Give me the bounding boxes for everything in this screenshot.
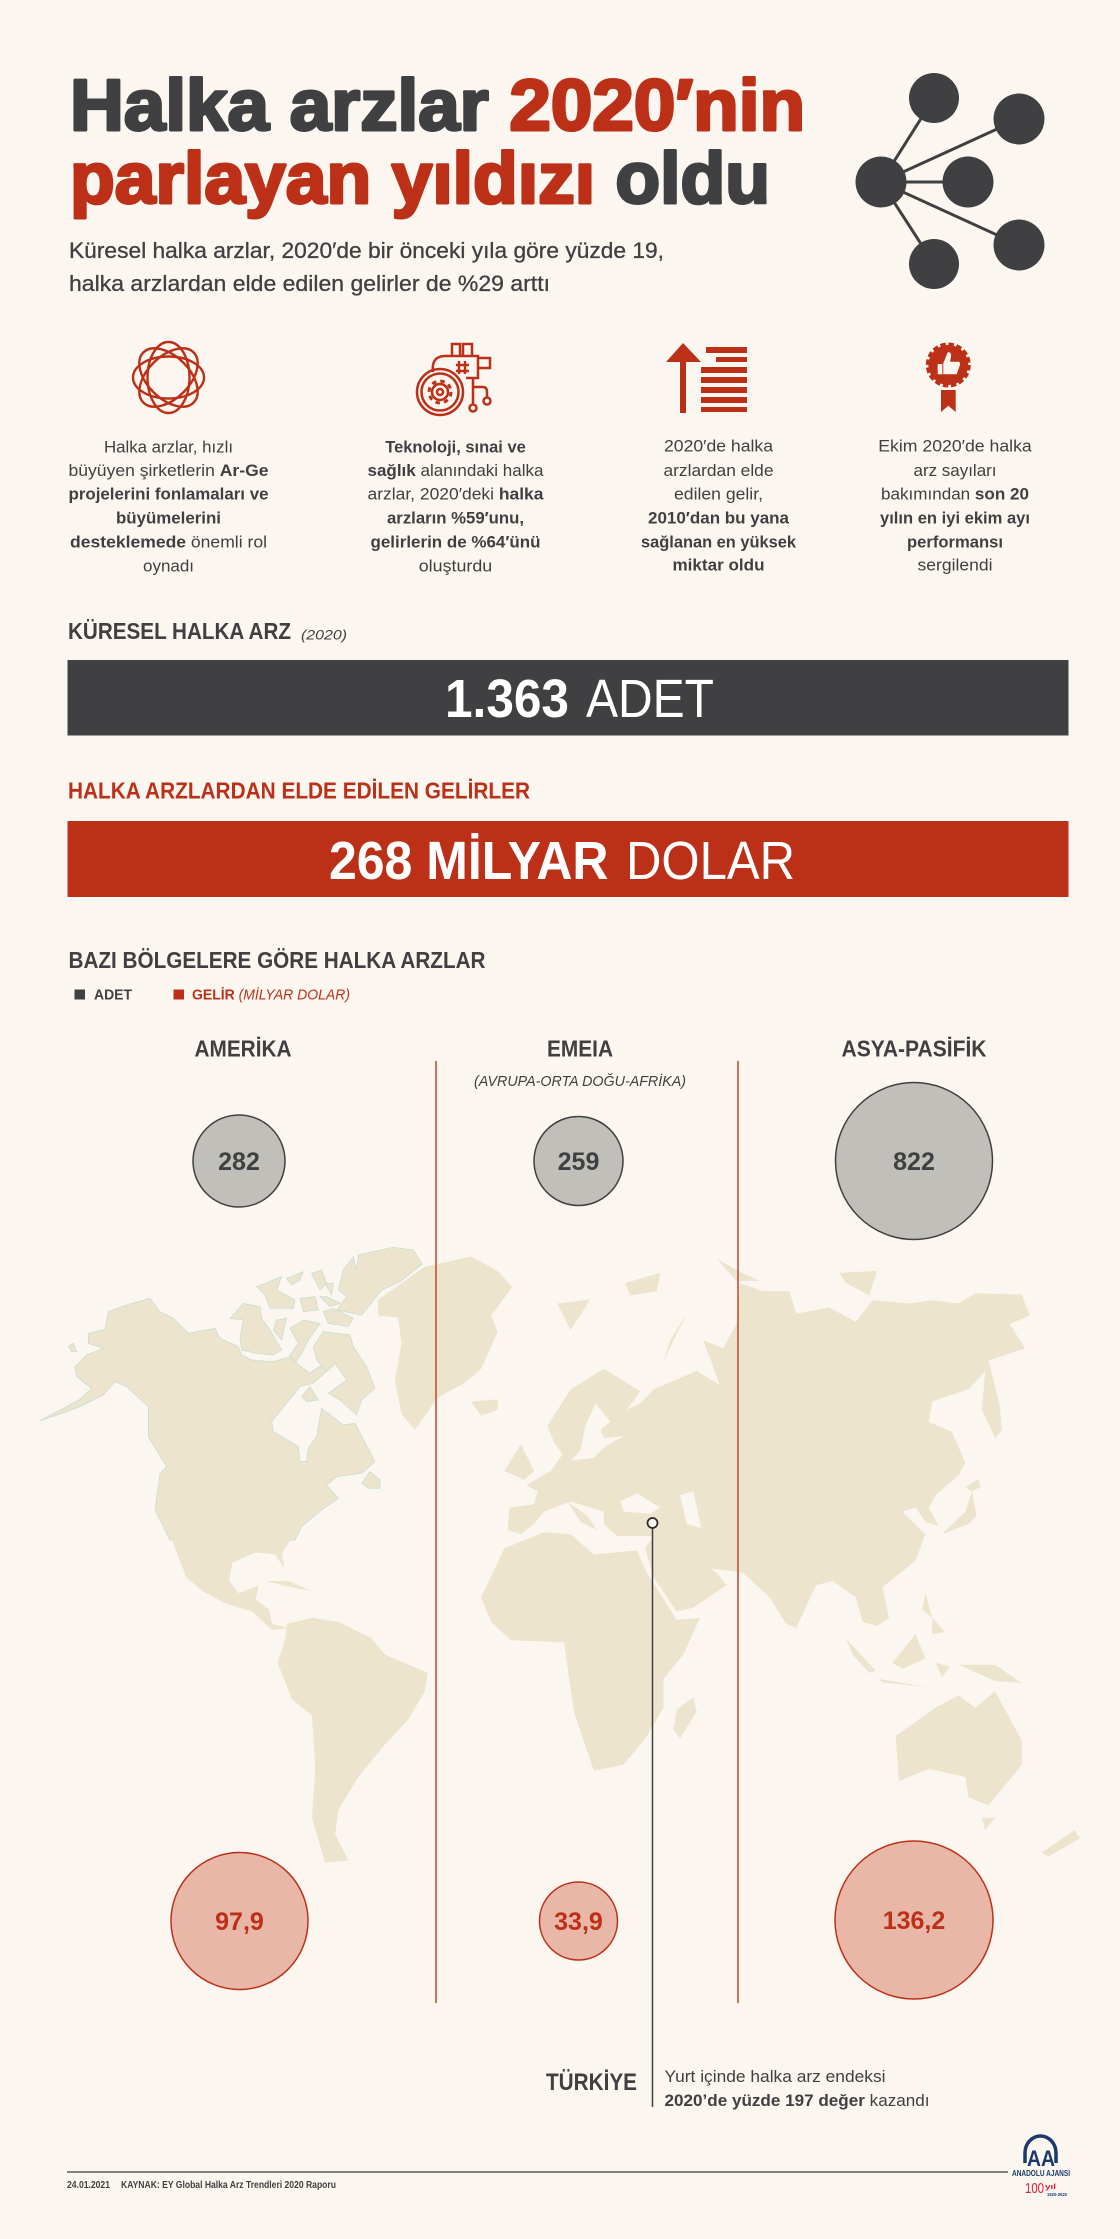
text: column 3: arzlardan elde [664, 462, 774, 480]
callout: Turkey: TÜRKİYE [546, 2069, 637, 2096]
subtitle: Küresel halka arzlar, 2020′de bir önceki yıla göre yüzde 19, [69, 238, 664, 263]
subtitle: halka arzlardan elde edilen gelirler de %29 arttı [69, 271, 550, 296]
callout: Turkey: 2020’de yüzde 197 değer kazandı [664, 2091, 930, 2110]
heading: EMEA: (AVRUPA-ORTA DOĞU-AFRİKA) [474, 1073, 686, 1090]
circle: EMEA proceeds: 33,9 [554, 1908, 603, 1936]
text: column 1 [68, 438, 268, 576]
panel: IPO proceeds bar: DOLAR [626, 831, 795, 891]
heading: Asia-Pacific: ASYA-PASİFİK [842, 1036, 987, 1062]
world map [40, 1247, 1080, 1863]
panel: IPO count bar: 1.363 [445, 669, 569, 729]
title [70, 66, 805, 219]
circle: EMEA count [534, 1116, 623, 1206]
text: column 2: oluşturdu [419, 558, 492, 576]
text: column 1: büyümelerini [116, 510, 221, 528]
icon: gear and circuit [417, 344, 490, 415]
icon: rising arrow and bars [666, 343, 747, 413]
circle: Americas proceeds: 97,9 [215, 1908, 264, 1936]
text: column 3: 2010′dan bu yana [648, 510, 790, 528]
heading: EMEA: EMEIA [547, 1036, 613, 1062]
text: column 3: 2020′de halka [664, 438, 774, 456]
circle: Asia-Pacific proceeds: 136,2 [883, 1907, 945, 1935]
text: column 4: sergilendi [918, 556, 992, 574]
text: column 1: oynadı [143, 558, 194, 576]
circle: Asia-Pacific count [836, 1082, 992, 1240]
text: column 3: edilen gelir, [674, 486, 763, 504]
logo: Anadolu Ajansi: 100 [1025, 2180, 1044, 2197]
panel: IPO proceeds bar [68, 821, 1068, 897]
callout: Turkey: Yurt içinde halka arz endeksi [664, 2067, 886, 2086]
other continents [170, 1257, 1080, 1863]
logo: Anadolu Ajansi: AA [1027, 2146, 1055, 2171]
legend [74, 986, 350, 1004]
text: column 4: arz sayıları [914, 462, 996, 480]
text: column 2: Teknoloji, sınai ve [385, 438, 526, 456]
heading: IPO proceeds: HALKA ARZLARDAN ELDE EDİLEN GELİRLER [68, 778, 530, 804]
text: column 3: miktar oldu [672, 556, 764, 574]
heading: EMEA [474, 1036, 686, 1090]
text: column 4: performansı [907, 534, 1003, 552]
circle: Asia-Pacific proceeds [835, 1841, 993, 1999]
text: column 1: büyüyen şirketlerin Ar-Ge [68, 462, 268, 480]
callout: Turkey [546, 2067, 930, 2110]
heading: by region: BAZI BÖLGELERE GÖRE HALKA ARZLAR [68, 947, 486, 973]
text: column 4: yılın en iyi ekim ayı [880, 510, 1030, 528]
text: column 2: arzlar, 2020′deki halka [368, 486, 544, 504]
icon: atom [129, 338, 208, 417]
footer source: KAYNAK: EY Global Halka Arz Trendleri 2020 Raporu [121, 2180, 336, 2191]
text: column 1: projelerini fonlamaları ve [68, 486, 268, 504]
text: column 2 [368, 438, 544, 576]
text: column 2: arzların %59′unu, [387, 510, 524, 528]
circle: EMEA proceeds [540, 1882, 618, 1960]
text: column 4: Ekim 2020′de halka [878, 438, 1033, 456]
icon: thumbs-up badge [927, 344, 969, 412]
text: column 3 [641, 438, 797, 574]
panel: IPO count bar [68, 660, 1068, 736]
text: column 4 [878, 438, 1033, 574]
circle: Asia-Pacific count: 822 [893, 1148, 935, 1176]
subtitle [69, 238, 664, 296]
panel: IPO count bar: ADET [586, 669, 714, 729]
turkey marker line [648, 1518, 658, 2107]
logo: Anadolu Ajansi [1012, 2136, 1070, 2197]
panel: IPO proceeds bar: 268 MİLYAR [329, 831, 608, 891]
title: Halka arzlar 2020′nin [70, 66, 805, 146]
circle: Americas count [193, 1115, 285, 1207]
north america and arctic [40, 1247, 422, 1540]
heading: global IPOs: KÜRESEL HALKA ARZ [68, 618, 291, 644]
circle: Americas count: 282 [218, 1148, 260, 1176]
text: column 4: bakımından son 20 [881, 486, 1029, 504]
text: column 1: Halka arzlar, hızlı [104, 438, 233, 456]
footer source: 24.01.2021 [67, 2180, 110, 2191]
logo: Anadolu Ajansi: yıl [1045, 2184, 1056, 2191]
text: column 1: desteklemede önemli rol [70, 534, 267, 552]
logo: Anadolu Ajansi: ANADOLU AJANSI [1012, 2169, 1070, 2178]
legend: ADET [94, 988, 132, 1004]
text: column 2: sağlık alanındaki halka [368, 462, 544, 480]
heading: global IPOs: (2020) [301, 626, 347, 642]
legend: GELİR (MİLYAR DOLAR) [192, 986, 350, 1004]
footer rule [67, 2171, 1008, 2173]
circle: Americas proceeds [171, 1852, 308, 1990]
heading: Americas: AMERİKA [194, 1036, 292, 1062]
text: column 3: sağlanan en yüksek [641, 534, 797, 552]
title: parlayan yıldızı oldu [70, 139, 770, 219]
logo: Anadolu Ajansi: 1920-2020 [1047, 2192, 1067, 2197]
dividers between regions [436, 1061, 738, 2003]
icon: network [856, 73, 1044, 289]
circle: EMEA count: 259 [558, 1148, 599, 1176]
text: column 2: gelirlerin de %64′ünü [370, 534, 540, 552]
